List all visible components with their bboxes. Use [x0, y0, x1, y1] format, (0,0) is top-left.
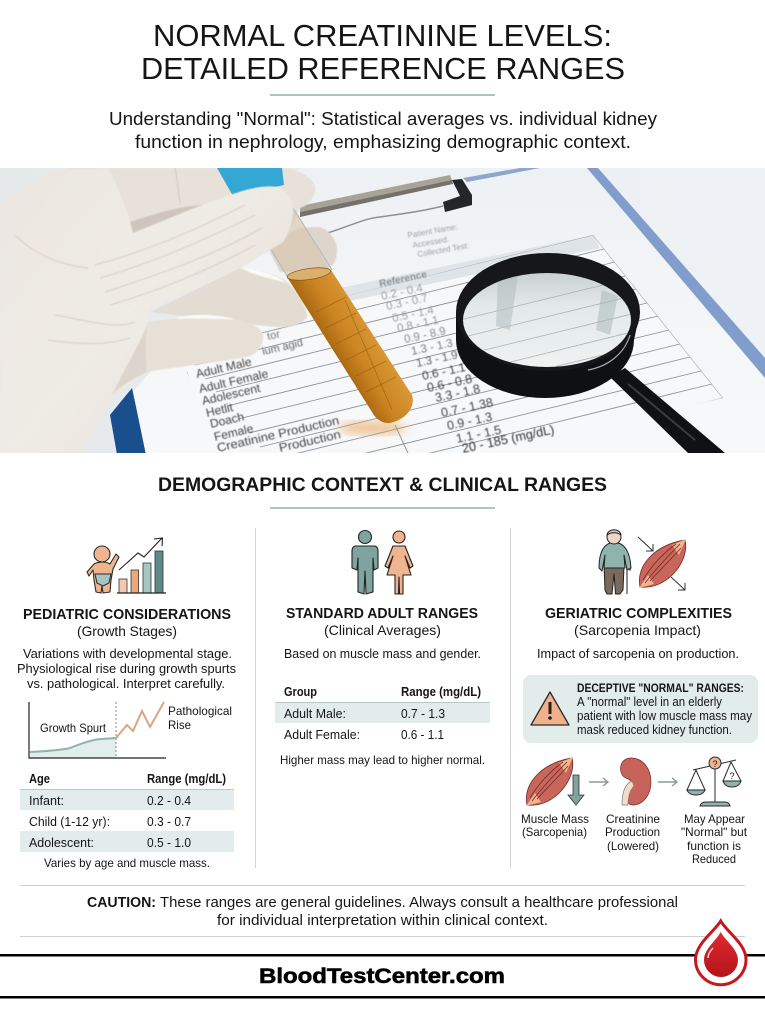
table: adult ranges [275, 685, 490, 742]
test tube [217, 168, 413, 423]
arrow [589, 778, 608, 786]
table: pediatric ranges [20, 772, 234, 852]
icon: kidney [621, 758, 651, 805]
flow labels: function is [687, 839, 741, 853]
section heading: DEMOGRAPHIC CONTEXT & CLINICAL RANGES [158, 474, 607, 496]
subheading: (Growth Stages) [77, 623, 177, 639]
caution note: These ranges are general guidelines. Always consult a healthcare professional [160, 895, 678, 911]
table: pediatric ranges: Adolescent: [29, 836, 94, 850]
icon: baby with growth chart [87, 538, 166, 593]
title: NORMAL CREATININE LEVELS: [153, 18, 612, 53]
body text: Impact of sarcopenia on production. [537, 646, 739, 661]
flow: muscle mass to creatinine to appearance [521, 757, 748, 866]
flow labels [521, 812, 748, 866]
icon: adult man and woman [352, 530, 413, 594]
heading: GERIATRIC COMPLEXITIES [545, 605, 732, 622]
line chart: growth spurt vs pathological rise: Rise [168, 718, 191, 732]
report paper: Collected Test: [417, 241, 470, 259]
report paper: Adolescent [201, 381, 262, 408]
icon: balance scale [687, 757, 741, 806]
report paper: Creatinine Production [216, 413, 340, 455]
flow labels: (Lowered) [607, 839, 659, 853]
callout: deceptive normal ranges: patient with low muscle mass may [577, 709, 753, 723]
report paper: 0.8 - 1.1 [396, 314, 440, 335]
report paper: 0.3 - 0.7 [385, 292, 429, 313]
subheading: (Clinical Averages) [324, 622, 441, 638]
orange glow under tube [338, 421, 406, 435]
flow labels: Production [605, 825, 660, 839]
report paper: Accessed: [412, 235, 450, 250]
table: pediatric ranges: 0.2 - 0.4 [147, 794, 191, 808]
panel: standard adult ranges [275, 530, 490, 767]
body text: vs. pathological. Interpret carefully. [27, 676, 225, 691]
table: adult ranges: Range (mg/dL) [401, 685, 481, 699]
table: pediatric ranges: 0.3 - 0.7 [147, 815, 191, 829]
flow labels: (Sarcopenia) [522, 825, 587, 839]
report paper: 0.6 - 0.8 [426, 372, 474, 395]
caution note: CAUTION: [87, 895, 156, 911]
line chart: growth spurt vs pathological rise: Pathological [168, 704, 232, 718]
line chart: growth spurt vs pathological rise: Growth Spurt [40, 721, 107, 735]
report paper: 1.1 - 1.5 [455, 423, 503, 446]
callout: deceptive normal ranges [523, 675, 758, 743]
glove: thumb and palm [0, 168, 293, 455]
note: Higher mass may lead to higher normal. [280, 753, 485, 767]
table: pediatric ranges: Infant: [29, 794, 64, 808]
subheading: (Sarcopenia Impact) [574, 622, 701, 638]
report paper: 0.6 - 1.1 [421, 360, 467, 383]
report paper: Patient Name: [407, 222, 458, 240]
title: DETAILED REFERENCE RANGES [141, 51, 625, 86]
icon: balance scale: ? [730, 771, 735, 781]
subtitle: function in nephrology, emphasizing demographic context. [135, 131, 631, 152]
line chart: growth spurt vs pathological rise [29, 702, 232, 758]
footer [0, 921, 765, 998]
title [141, 18, 625, 86]
report paper: 0.9 - 8.9 [403, 325, 447, 346]
body text [17, 646, 236, 691]
report paper: 1.3 - 1.9 [415, 349, 459, 370]
callout: deceptive normal ranges: mask reduced kidney function. [577, 723, 732, 737]
report paper: ium agid [261, 337, 304, 358]
clipboard clip [300, 175, 472, 233]
report paper: Adult Female [198, 366, 270, 396]
flow labels: Muscle Mass [521, 812, 589, 826]
glove: back fingers [60, 168, 337, 372]
flow labels: "Normal" but [681, 825, 748, 839]
subtitle [109, 108, 658, 152]
heading: STANDARD ADULT RANGES [286, 605, 478, 622]
table: adult ranges: Adult Female: [284, 728, 360, 742]
report paper: Production [278, 427, 342, 455]
report paper: 20 - 185 (mg/dL) [461, 422, 556, 456]
flow labels: May Appear [684, 812, 745, 826]
arrow [658, 778, 677, 786]
body text: Physiological rise during growth spurts [17, 661, 236, 676]
flow labels: Creatinine [606, 812, 660, 826]
report paper: Female [213, 421, 255, 444]
report paper: 0.7 - 1.38 [440, 395, 494, 420]
report paper: tor [266, 328, 282, 343]
body text: Based on muscle mass and gender. [284, 646, 481, 661]
report paper [133, 168, 765, 453]
report paper: Adult Male [195, 354, 253, 381]
hero photo: gloved hand, test tube, lab report and magnifier [0, 168, 765, 453]
clipboard edge [110, 388, 146, 453]
icon: blood drop logo [696, 921, 746, 985]
icon: muscle with arrows [638, 537, 686, 590]
icon: balance scale: ? [712, 759, 718, 769]
caution note [87, 895, 678, 929]
table: adult ranges: 0.6 - 1.1 [401, 728, 444, 742]
icon: small muscle with down arrow [526, 757, 584, 806]
table: adult ranges: 0.7 - 1.3 [401, 707, 445, 721]
report paper: Doach [209, 409, 245, 431]
table: pediatric ranges: Child (1-12 yr): [29, 815, 110, 829]
flow labels: Reduced [692, 852, 736, 866]
report paper: Reference [378, 269, 428, 290]
report paper: 0.9 - 1.3 [446, 410, 494, 433]
magnifying glass [456, 253, 725, 453]
table: adult ranges: Group [284, 685, 317, 699]
note: Varies by age and muscle mass. [44, 856, 210, 870]
caution note: for individual interpretation within clinical context. [217, 913, 548, 929]
icon: elderly person with cane [599, 530, 631, 594]
heading: PEDIATRIC CONSIDERATIONS [23, 606, 231, 623]
subtitle: Understanding "Normal": Statistical averages vs. individual kidney [109, 108, 658, 129]
table: pediatric ranges: Age [29, 772, 50, 786]
footer: BloodTestCenter.com [259, 964, 505, 988]
report paper: Hetlit [205, 400, 235, 420]
report paper: 0.2 - 0.4 [380, 282, 424, 303]
callout: deceptive normal ranges: A "normal" level in an elderly [577, 695, 723, 709]
report paper: 3.3 - 1.8 [434, 382, 482, 405]
panel: pediatric considerations [17, 538, 236, 870]
icon: warning triangle [531, 692, 569, 725]
report paper: 1.3 - 1.3 [410, 337, 454, 358]
body text: Variations with developmental stage. [23, 646, 232, 661]
table: adult ranges: Adult Male: [284, 707, 346, 721]
report paper: 0.5 - 1.4 [391, 304, 435, 325]
table: pediatric ranges: 0.5 - 1.0 [147, 836, 191, 850]
panel: geriatric complexities [521, 530, 758, 866]
table: pediatric ranges: Range (mg/dL) [147, 772, 226, 786]
